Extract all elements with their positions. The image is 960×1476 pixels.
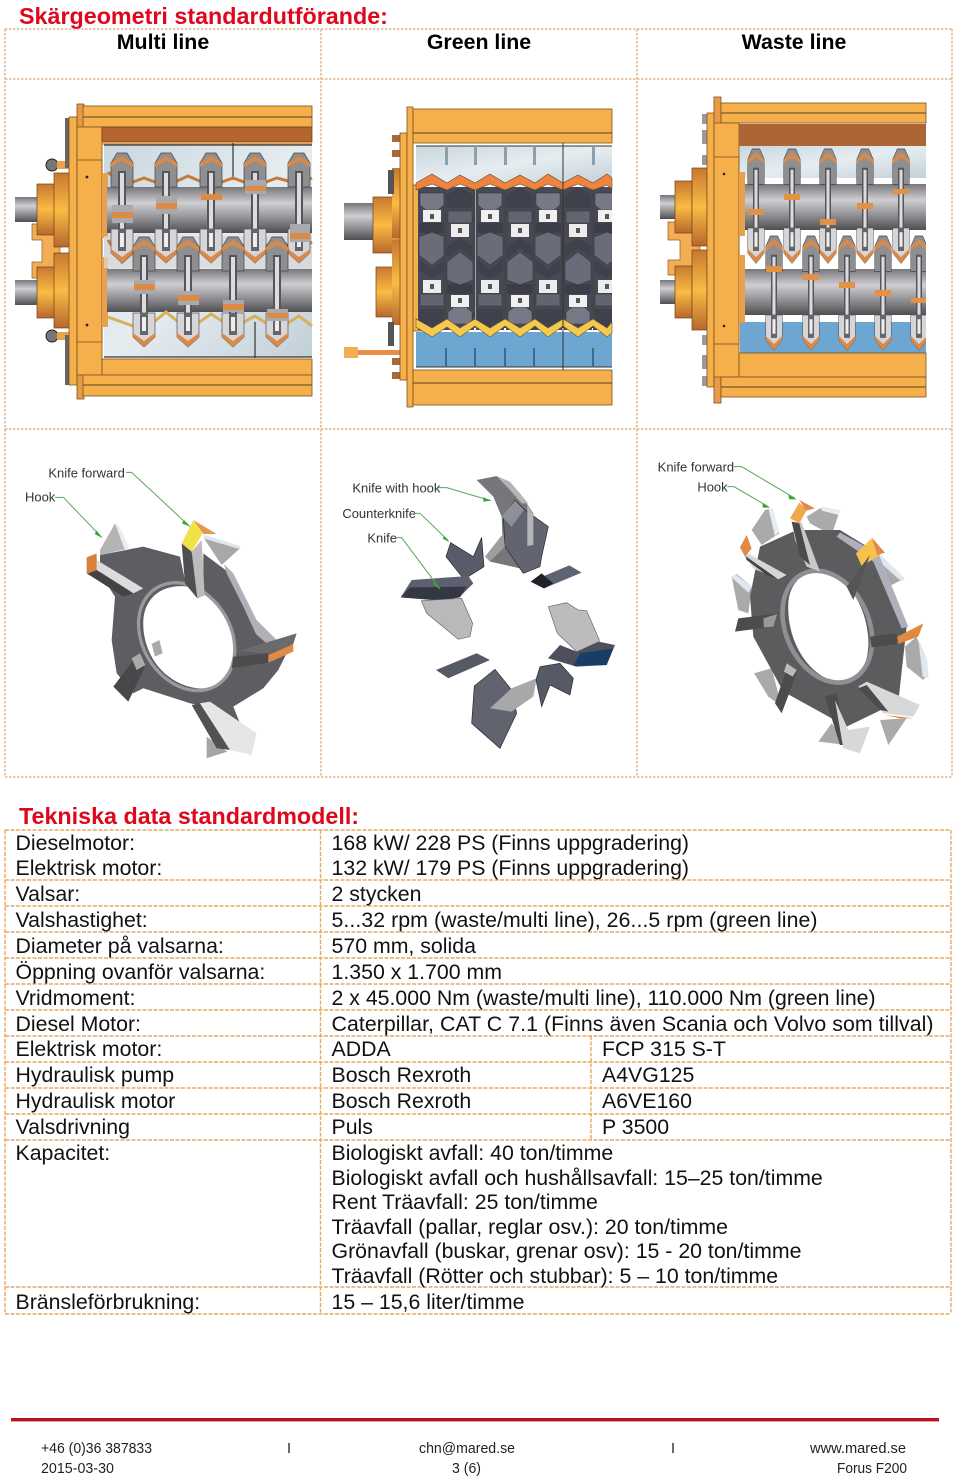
row values: FCP 315 S-T [602,1037,726,1061]
row labels: Vridmoment: [16,986,135,1010]
row values: Träavfall (pallar, reglar osv.): 20 ton/timme [332,1215,728,1239]
callout: Knife forward [658,460,797,499]
footer: +46 (0)36 387833 [41,1441,152,1457]
callout: Hook [697,479,770,508]
table: technical data [5,830,951,1314]
callout: Counterknife [342,506,449,542]
footer: I [287,1441,291,1457]
row values: 5...32 rpm (waste/multi line), 26...5 rpm (green line) [332,908,818,932]
footer: www.mared.se [809,1441,906,1457]
row values: 2 stycken [332,882,421,906]
callout: Knife with hook [352,480,491,502]
row values: A4VG125 [602,1063,694,1087]
row values: Biologiskt avfall och hushållsavfall: 15–25 ton/timme [332,1166,823,1190]
row labels: Dieselmotor: [16,831,135,855]
illustration: Multi line shredder rotors [15,104,312,399]
row values: Puls [332,1115,373,1139]
row values: 132 kW/ 179 PS (Finns uppgradering) [332,856,689,880]
column heading: Multi line: Multi line [117,30,209,54]
callout: Counterknife: Counterknife [342,506,416,521]
footer: I [671,1441,675,1457]
callout: Knife forward [48,465,190,527]
row values: Träavfall (Rötter och stubbar): 5 – 10 ton/timme [332,1264,778,1288]
callout: Knife forward: Knife forward [48,465,125,480]
callout: Knife with hook: Knife with hook [352,480,441,495]
row labels: Diameter på valsarna: [16,934,224,958]
callout: Knife [367,531,441,590]
illustration: Waste line knife disc [658,460,928,753]
row labels: Valsdrivning [16,1115,130,1139]
row values: Rent Träavfall: 25 ton/timme [332,1190,598,1214]
row labels: Hydraulisk motor [16,1089,175,1113]
callout: Hook [25,490,102,538]
row labels: Hydraulisk pump [16,1063,174,1087]
illustration: Waste line shredder rotors [660,97,927,403]
row values: P 3500 [602,1115,669,1139]
row labels: Valsar: [16,882,80,906]
row values: Biologiskt avfall: 40 ton/timme [332,1141,613,1165]
row values: 2 x 45.000 Nm (waste/multi line), 110.000 Nm (green line) [332,986,876,1010]
footer: chn@mared.se [419,1441,515,1457]
row values: 1.350 x 1.700 mm [332,960,502,984]
callout: Hook: Hook [25,490,56,505]
column heading: Waste line: Waste line [742,30,846,54]
row values: 570 mm, solida [332,934,476,958]
row values: ADDA [332,1037,391,1061]
row labels: Öppning ovanför valsarna: [16,960,265,984]
row labels: Valshastighet: [16,908,148,932]
callout: Knife forward: Knife forward [658,460,734,475]
row values: Bosch Rexroth [332,1089,471,1113]
row values: 15 – 15,6 liter/timme [332,1290,524,1314]
heading: technical data: Tekniska data standardmodell: [19,803,359,829]
illustration: Green line shredder rotors [344,107,621,407]
illustration: Multi line knife disc [25,465,297,758]
row values: Caterpillar, CAT C 7.1 (Finns även Scania och Volvo som tillval) [332,1012,934,1036]
row labels: Bränsleförbrukning: [16,1290,200,1314]
illustration: Green line knife set [342,476,615,748]
footer [41,1441,907,1476]
row values: Bosch Rexroth [332,1063,471,1087]
row values [332,831,934,1314]
row labels: Diesel Motor: [16,1012,141,1036]
footer rule [11,1418,939,1421]
row labels: Elektrisk motor: [16,856,162,880]
row values: Grönavfall (buskar, grenar osv): 15 - 20 ton/timme [332,1239,801,1263]
panel: knife geometry grid [5,29,952,777]
callout: Knife: Knife [367,531,397,546]
heading: knife geometry: Skärgeometri standardutförande: [19,3,388,29]
column heading: Green line: Green line [427,30,531,54]
row labels: Kapacitet: [16,1141,110,1165]
row labels [16,831,265,1314]
row values: A6VE160 [602,1089,692,1113]
callout: Hook: Hook [697,479,728,494]
row labels: Elektrisk motor: [16,1037,162,1061]
row values: 168 kW/ 228 PS (Finns uppgradering) [332,831,689,855]
